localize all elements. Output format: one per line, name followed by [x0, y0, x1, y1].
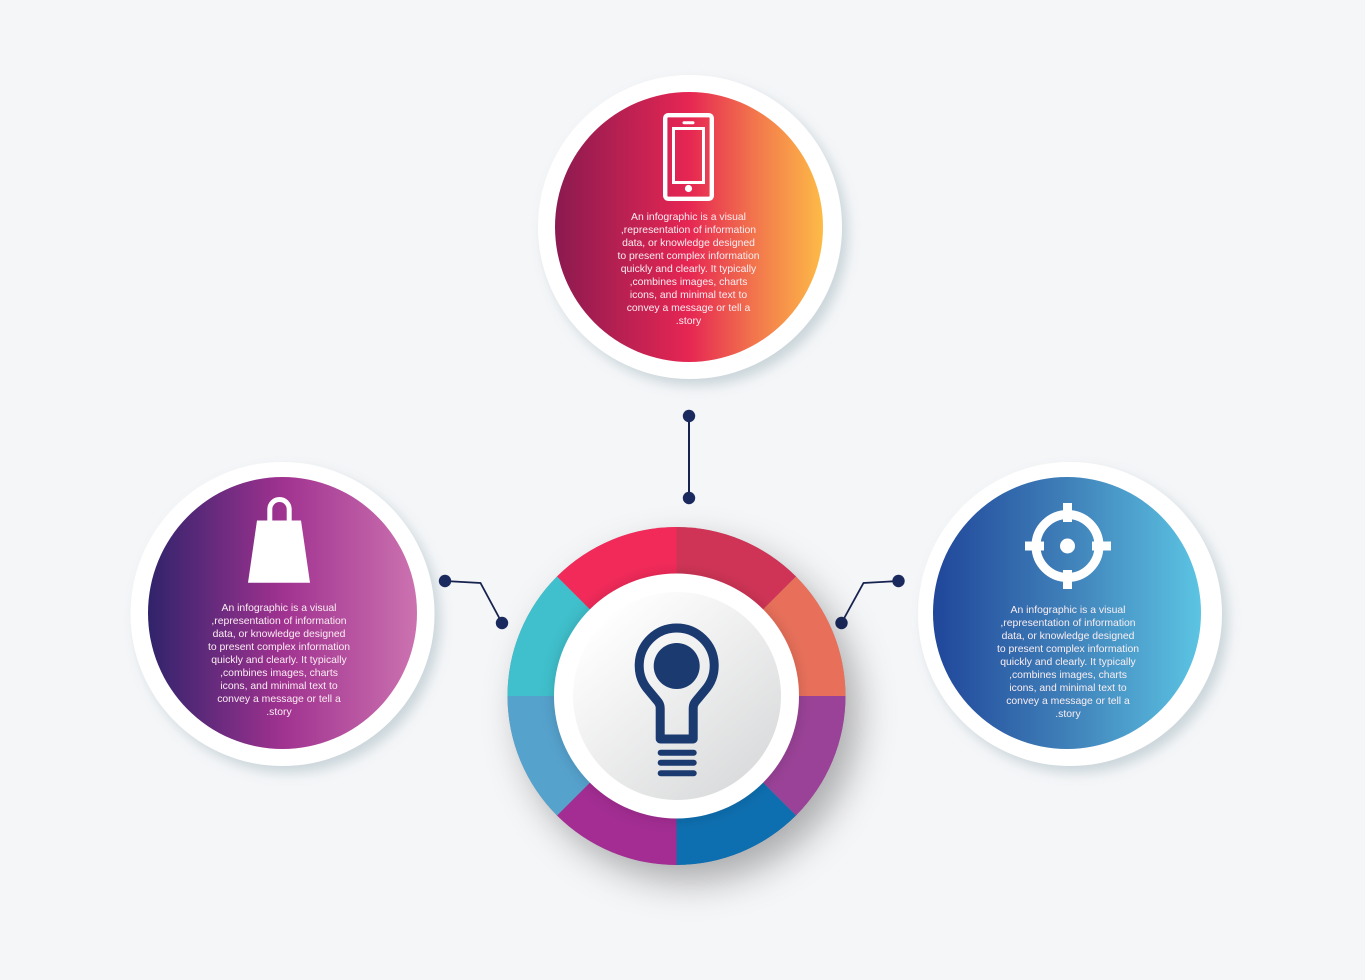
connector: left	[439, 575, 508, 629]
segment: violet	[676, 696, 846, 816]
text: left description: ,combines images, charts	[220, 668, 338, 679]
panel: top circle	[538, 75, 842, 379]
text: right description: to present complex information	[997, 644, 1139, 655]
text: left description: .story	[266, 707, 293, 718]
text: left description: An infographic is a visual	[222, 603, 336, 614]
text: top description	[617, 212, 760, 327]
text: right description: data, or knowledge designed	[1002, 631, 1135, 642]
text: right description: convey a message or tell a	[1006, 696, 1130, 707]
text: left description: ,representation of information	[211, 616, 347, 627]
text: left description	[208, 603, 350, 718]
segment: red left	[557, 527, 676, 696]
text: left description: to present complex information	[208, 642, 350, 653]
text: right description: ,combines images, charts	[1009, 670, 1127, 681]
icon: light bulb	[639, 628, 714, 776]
center white disc	[554, 574, 799, 818]
text: top description: to present complex information	[617, 251, 760, 262]
connector: top	[683, 410, 695, 504]
text: left description: quickly and clearly. It typically	[211, 655, 348, 666]
text: top description: .story	[676, 316, 702, 327]
text: left description: icons, and minimal text to	[220, 681, 338, 692]
text: right description: An infographic is a visual	[1011, 605, 1125, 616]
text: left description: convey a message or tell a	[217, 694, 341, 705]
text: top description: quickly and clearly. It typically	[621, 264, 757, 275]
panel: right circle	[918, 462, 1222, 766]
text: right description	[997, 605, 1139, 720]
segment: crimson	[676, 527, 796, 696]
text: right description: icons, and minimal text to	[1009, 683, 1127, 694]
text: right description: .story	[1055, 709, 1082, 720]
segment: light blue	[508, 696, 676, 816]
segment: orange	[676, 576, 846, 696]
text: top description: convey a message or tell a	[627, 303, 751, 314]
text: top description: ,representation of information	[621, 225, 756, 236]
text: top description: An infographic is a visual	[631, 212, 746, 223]
icon: smartphone	[665, 115, 712, 199]
text: right description: quickly and clearly. It typically	[1000, 657, 1137, 668]
text: top description: ,combines images, charts	[630, 277, 747, 288]
icon: shopping bag	[248, 500, 310, 583]
center gray disc	[573, 592, 781, 800]
segment: magenta	[557, 696, 676, 865]
text: top description: data, or knowledge designed	[622, 238, 755, 249]
text: left description: data, or knowledge designed	[213, 629, 346, 640]
segment: blue	[676, 696, 796, 865]
text: right description: ,representation of information	[1000, 618, 1136, 629]
icon: target crosshair	[1025, 503, 1111, 589]
connector: right	[835, 575, 905, 629]
panel: center segmented ring	[508, 527, 846, 865]
segment: teal	[508, 576, 676, 696]
text: top description: icons, and minimal text to	[630, 290, 747, 301]
panel: left circle	[130, 462, 434, 766]
